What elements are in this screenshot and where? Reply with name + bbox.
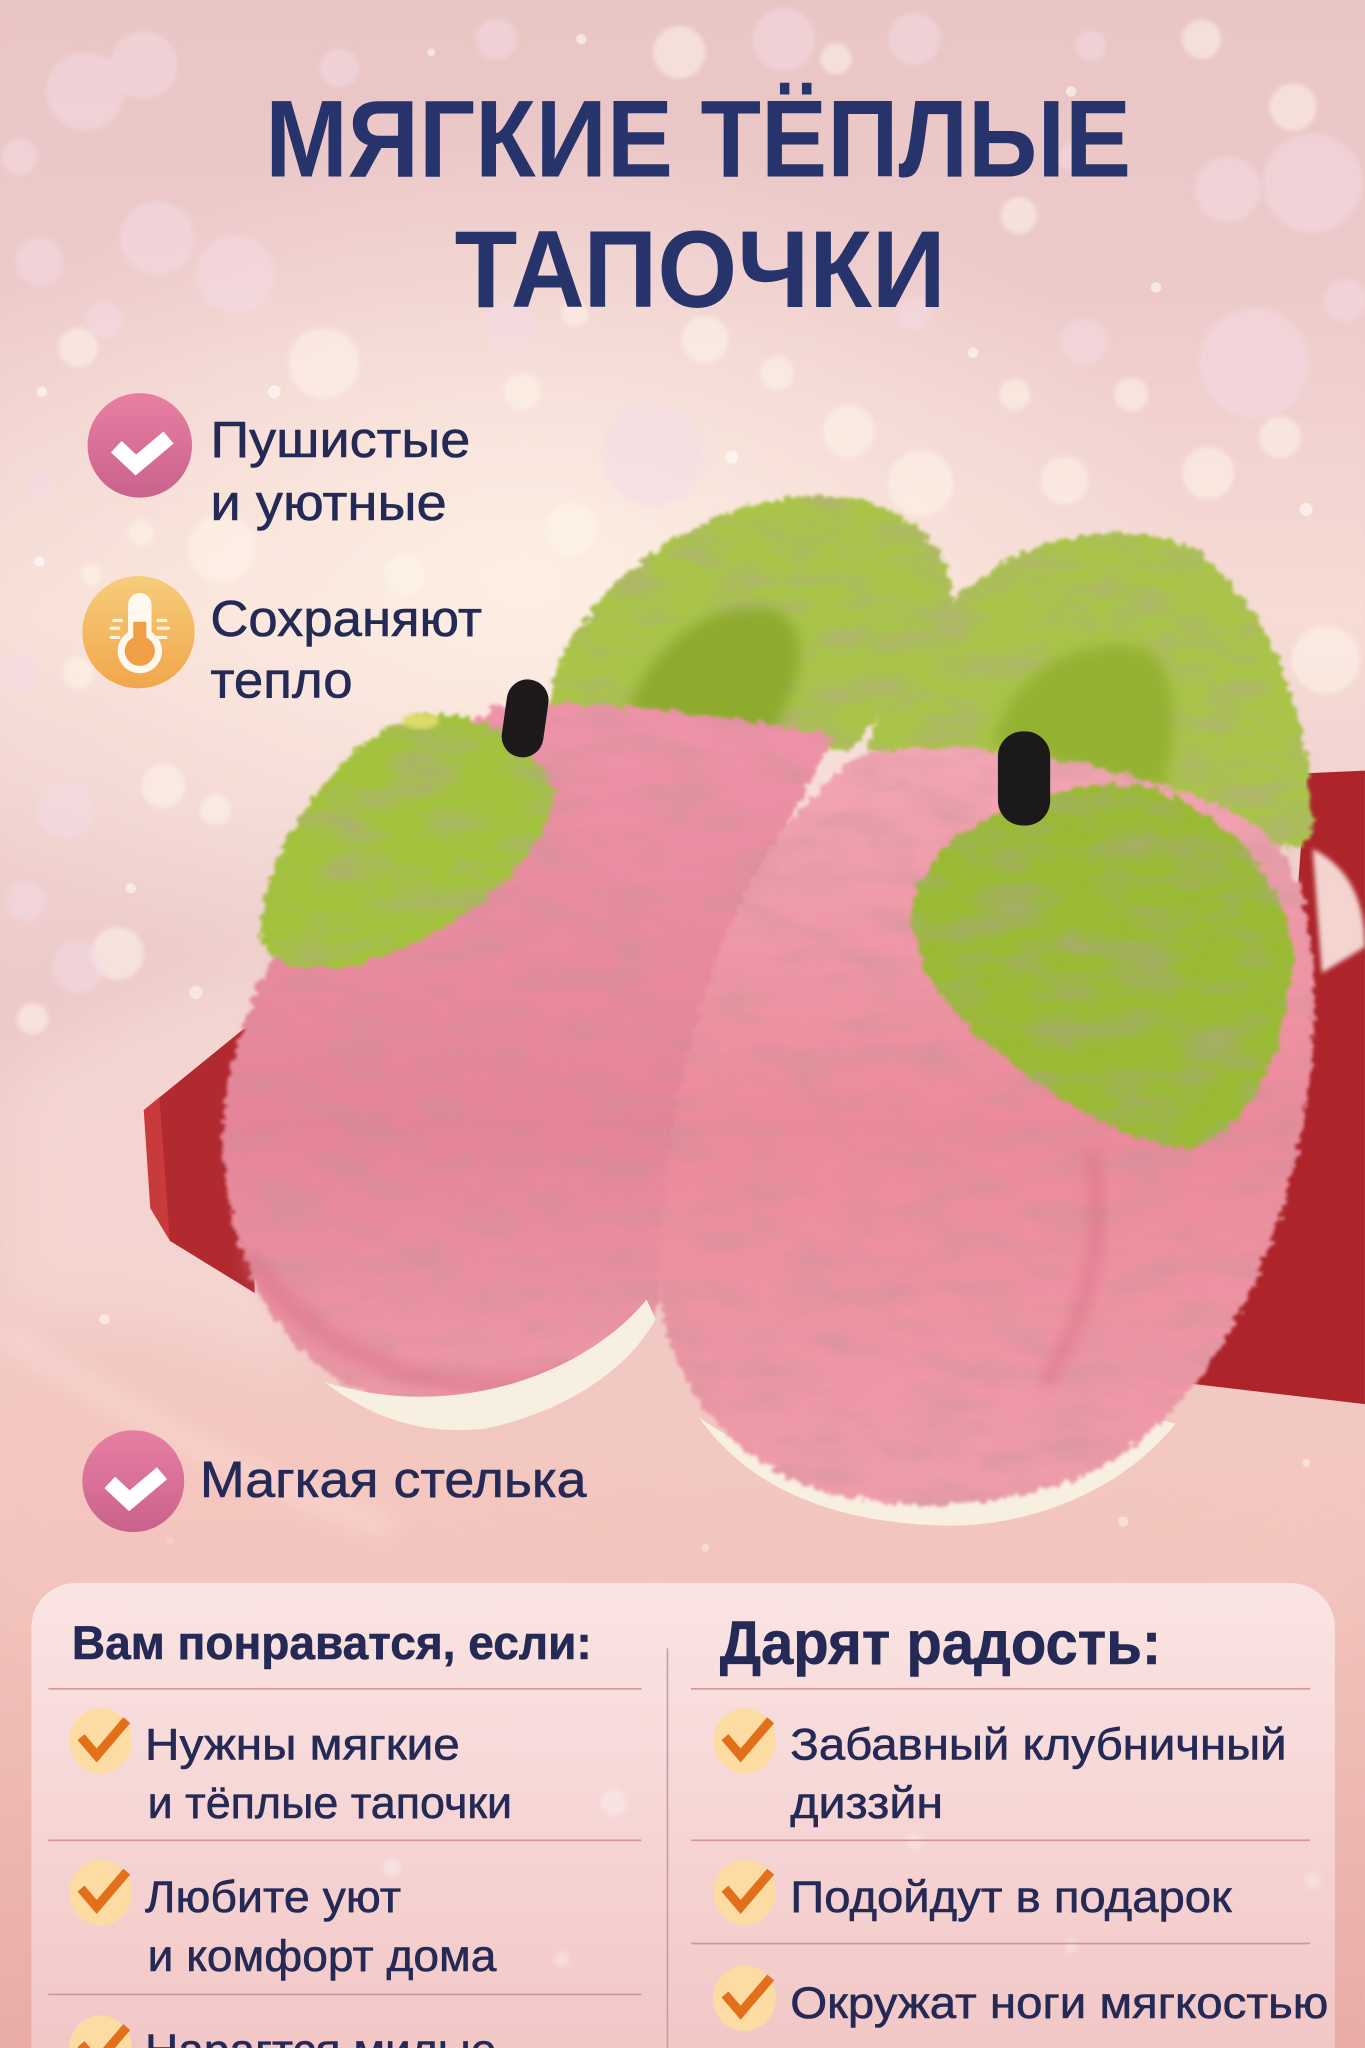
item: soft and warm: и тёплые тапочки [148,1779,512,1828]
icon: thermometer [82,576,195,688]
right slipper [659,533,1314,1526]
fur shading [248,1254,575,1384]
title: ТАПОЧКИ [455,209,946,331]
stem [499,677,551,760]
label: fluffy: Пушистые [210,411,470,468]
label: warm [210,590,482,708]
fur seam [1045,1149,1097,1384]
left slipper [223,496,952,1430]
item: design: диззйн [790,1779,943,1828]
divider: vertical [666,1648,668,2048]
illustration: red gift box [144,771,1365,1404]
stem [998,731,1050,825]
label: fluffy: и уютные [210,474,447,531]
leaf [261,715,555,968]
label: warm: тепло [210,651,353,708]
sole [699,1417,1176,1526]
icon: pink check [88,393,192,498]
sole [324,1300,656,1430]
item: gift: Подойдут в подарок [790,1873,1232,1922]
title [265,78,1131,331]
heading: right: Дарят радость: [720,1609,1161,1678]
item: comfort: Любите уют [145,1873,401,1922]
illustration: slippers [223,496,1314,1526]
item: gift [713,1860,1232,1925]
item: softness [713,1966,1328,2031]
icon: pink check [82,1430,184,1532]
label: fluffy [210,411,470,531]
leaf [912,784,1293,1149]
item: softness: Окружат ноги мягкостью [790,1979,1328,2028]
title: МЯГКИЕ ТЁПЛЫЕ [265,78,1131,200]
heading: left: Вам понраватся, если: [72,1616,592,1669]
item: cute [69,2015,496,2048]
left column [69,1616,592,2048]
feature: keep warm [82,576,482,708]
label: insole: Магкая стелька [200,1451,587,1508]
right column [713,1609,1328,2031]
feature: soft insole [82,1430,587,1532]
item: design [713,1708,1287,1828]
feature: fluffy and cosy [88,393,470,531]
item: design: Забавный клубничный [790,1720,1287,1769]
item: soft and warm: Нужны мягкие [145,1720,460,1769]
item: comfort: и комфорт дома [148,1932,497,1981]
item: soft and warm [69,1708,512,1828]
item: comfort [69,1860,497,1981]
label: warm: Сохраняют [210,590,482,647]
panel: bottom info [31,1583,1335,2048]
